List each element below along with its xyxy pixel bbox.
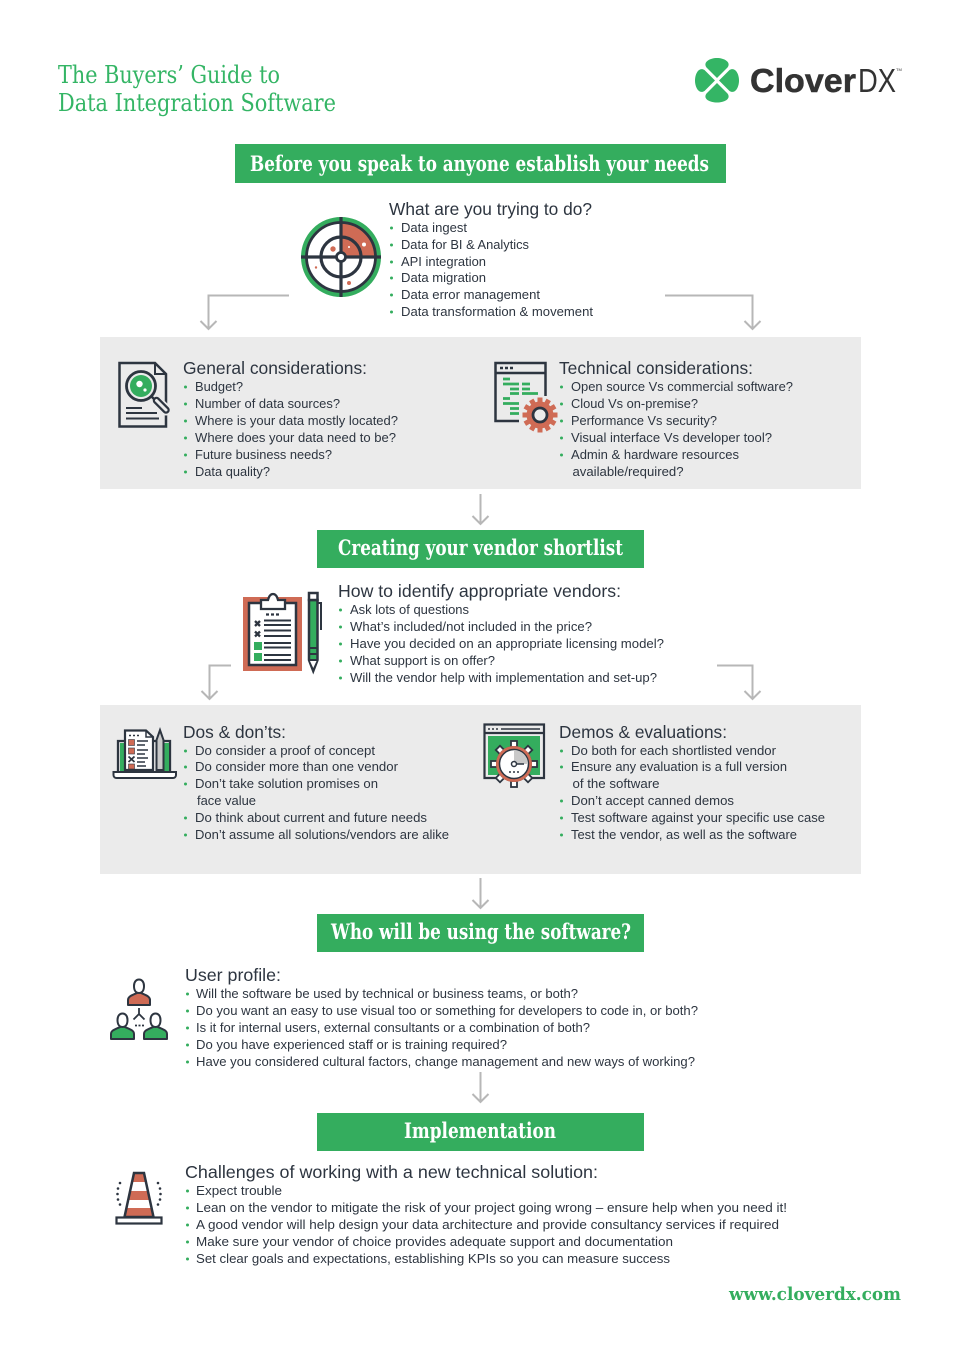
text block: user profile: Have you considered cultural factors, change management and new ways of working? <box>196 1054 695 1069</box>
text block: technical considerations: Admin & hardware resources <box>571 447 739 462</box>
text block: general considerations: Future business needs? <box>195 447 332 462</box>
text block: what are you trying to do: What are you trying to do? <box>389 199 592 219</box>
footer url: www.cloverdx.com <box>728 1284 901 1305</box>
banner: vendor shortlist: Creating your vendor shortlist <box>338 535 623 560</box>
text block: general considerations: Data quality? <box>195 464 270 479</box>
text block: technical considerations: available/required? <box>572 464 684 479</box>
text block: challenges: Make sure your vendor of choice provides adequate support and documentation <box>196 1234 673 1249</box>
text block: general considerations: Where does your data need to be? <box>195 430 396 445</box>
text block: general considerations: Where is your data mostly located? <box>195 413 398 428</box>
text block: what are you trying to do <box>389 199 593 319</box>
text block: challenges: A good vendor will help design your data architecture and provide consultancy services if required <box>196 1217 779 1232</box>
icon: document magnifier <box>120 363 166 426</box>
text block: dos and don'ts: Dos & don’ts: <box>183 722 286 742</box>
arrow: to vendor shortlist <box>472 494 488 524</box>
logo: CloverDX <box>695 58 902 102</box>
arrow: to who will be using <box>472 878 488 908</box>
text block: user profile: Do you want an easy to use visual too or something for developers to code in, or both? <box>196 1003 698 1018</box>
text block: demos and evaluations: Don’t accept canned demos <box>571 793 735 808</box>
text block: what are you trying to do: Data ingest <box>401 220 467 235</box>
text block: demos and evaluations: Demos & evaluations: <box>559 722 727 742</box>
icon: clipboard and pen <box>243 593 321 671</box>
text block: what are you trying to do: Data transformation & movement <box>401 304 593 319</box>
text block: dos and don'ts: face value <box>197 793 256 808</box>
title <box>58 61 336 117</box>
text block: challenges: Expect trouble <box>196 1183 282 1198</box>
text block: user profile: Do you have experienced staff or is training required? <box>196 1037 507 1052</box>
text block: what are you trying to do: API integration <box>401 254 486 269</box>
title: The Buyers’ Guide to <box>58 61 280 89</box>
text block: challenges: Challenges of working with a new technical solution: <box>185 1162 598 1182</box>
banner: who will be using the software <box>317 914 644 952</box>
panel: considerations <box>100 337 861 489</box>
text block: challenges <box>185 1162 787 1266</box>
text block: general considerations <box>183 358 398 479</box>
text block: dos and don'ts: Do consider more than one vendor <box>195 759 399 774</box>
icon: code window with gear <box>496 363 558 432</box>
text block: dos and don'ts: Do consider a proof of concept <box>195 743 375 758</box>
text block: challenges: Set clear goals and expectations, establishing KPIs so you can measure success <box>196 1251 671 1266</box>
text block: identify vendors: What’s included/not included in the price? <box>350 619 592 634</box>
text block: demos and evaluations: Test software against your specific use case <box>571 810 825 825</box>
text block: technical considerations: Performance Vs security? <box>571 413 717 428</box>
text block: identify vendors <box>338 581 664 685</box>
text block: identify vendors: What support is on offer? <box>350 653 495 668</box>
icon: target radar <box>301 217 381 297</box>
banner: establish your needs <box>235 144 726 183</box>
text block: what are you trying to do: Data error management <box>401 287 540 302</box>
banner: vendor shortlist <box>317 530 644 568</box>
text block: identify vendors: Have you decided on an appropriate licensing model? <box>350 636 664 651</box>
icon: laptop checklist <box>114 730 176 778</box>
title: Data Integration Software <box>58 89 336 117</box>
text block: identify vendors: Ask lots of questions <box>350 602 469 617</box>
text block: general considerations: General considerations: <box>183 358 367 378</box>
text block: user profile <box>185 965 698 1069</box>
icon: user hierarchy <box>111 980 167 1039</box>
logo: CloverDX: Clover <box>750 62 856 99</box>
arrow: left to dos and don'ts <box>202 666 231 699</box>
text block: what are you trying to do: Data migration <box>401 270 486 285</box>
arrow: left to general considerations <box>200 296 289 329</box>
banner: who will be using the software: Who will be using the software? <box>330 919 631 944</box>
icon: demo window with dial gear <box>484 724 544 787</box>
banner: implementation: Implementation <box>404 1118 556 1143</box>
panel: dos and demos <box>100 705 861 874</box>
arrow: right to technical considerations <box>665 296 760 329</box>
text block: challenges: Lean on the vendor to mitigate the risk of your project going wrong – ensure help when you need it! <box>196 1200 787 1215</box>
text block: identify vendors: How to identify appropriate vendors: <box>338 581 621 601</box>
arrow: to implementation <box>472 1072 488 1102</box>
text block: demos and evaluations: of the software <box>572 776 660 791</box>
text block: dos and don'ts: Don’t assume all solutions/vendors are alike <box>195 827 449 842</box>
text block: user profile: Is it for internal users, external consultants or a combination of both? <box>196 1020 590 1035</box>
text block: dos and don'ts <box>183 722 449 842</box>
text block: demos and evaluations: Do both for each shortlisted vendor <box>571 743 777 758</box>
text block: technical considerations: Technical considerations: <box>559 358 753 378</box>
text block: demos and evaluations <box>559 722 825 842</box>
text block: dos and don'ts: Do think about current and future needs <box>195 810 428 825</box>
logo: CloverDX: DX <box>858 62 896 99</box>
text block: technical considerations <box>559 358 793 479</box>
text block: what are you trying to do: Data for BI & Analytics <box>401 237 529 252</box>
text block: general considerations: Budget? <box>195 379 243 394</box>
text block: user profile: User profile: <box>185 965 281 985</box>
logo: CloverDX: TM <box>896 67 902 72</box>
text block: user profile: Will the software be used by technical or business teams, or both? <box>196 986 578 1001</box>
text block: demos and evaluations: Ensure any evaluation is a full version <box>571 759 787 774</box>
banner: establish your needs: Before you speak to anyone establish your needs <box>250 151 709 176</box>
text block: technical considerations: Open source Vs commercial software? <box>571 379 793 394</box>
banner: implementation <box>317 1113 644 1151</box>
text block: dos and don'ts: Don’t take solution promises on <box>195 776 378 791</box>
text block: technical considerations: Visual interface Vs developer tool? <box>571 430 772 445</box>
text block: demos and evaluations: Test the vendor, as well as the software <box>571 827 797 842</box>
icon: traffic cone <box>116 1173 162 1224</box>
text block: identify vendors: Will the vendor help with implementation and set-up? <box>350 670 657 685</box>
text block: technical considerations: Cloud Vs on-premise? <box>571 396 698 411</box>
text block: general considerations: Number of data sources? <box>195 396 340 411</box>
arrow: right to demos <box>717 666 760 699</box>
